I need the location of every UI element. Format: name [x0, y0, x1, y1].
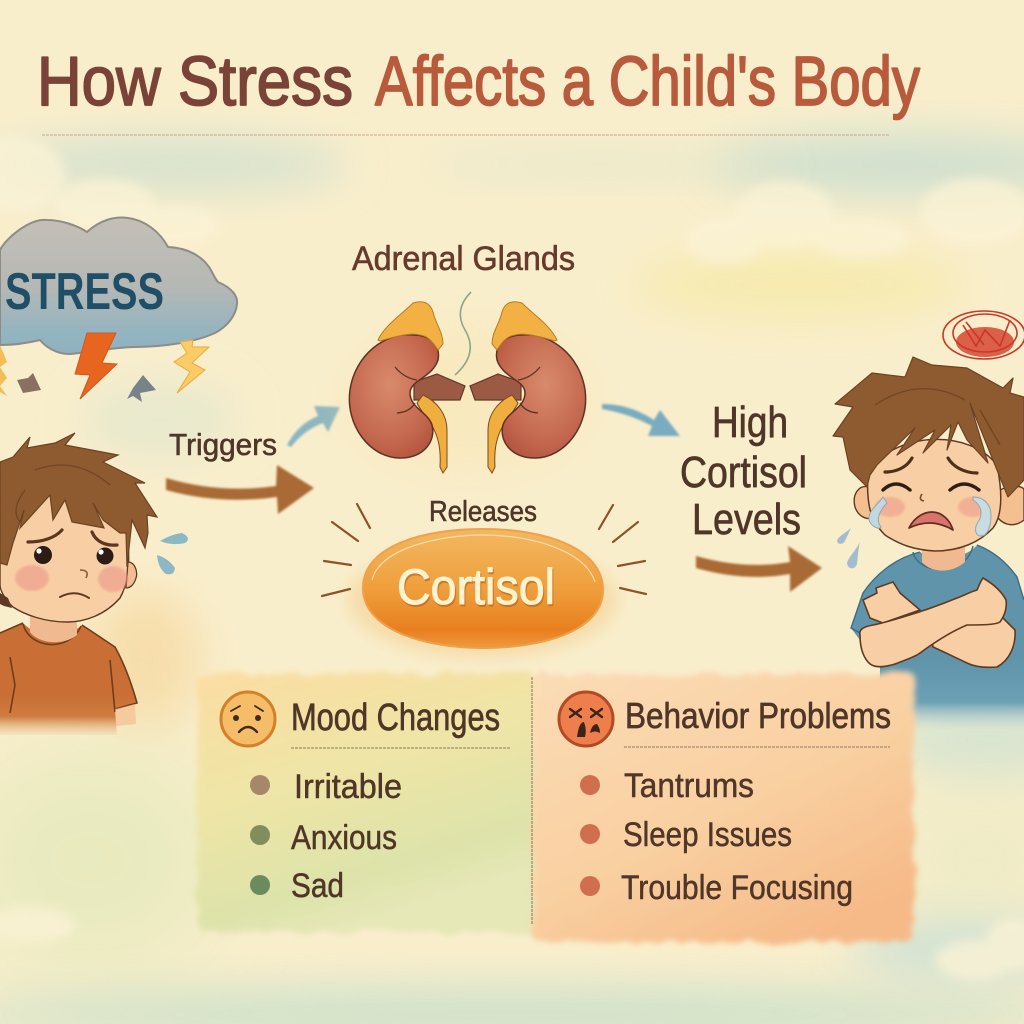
list: mood: Irritable	[294, 768, 402, 806]
high cortisol levels label: Levels	[692, 495, 801, 544]
title: How Stress	[37, 42, 353, 120]
list: mood: Sad	[291, 867, 344, 905]
triggers label: Triggers	[169, 427, 277, 462]
shirt	[851, 545, 1024, 730]
neck	[922, 545, 965, 571]
right kidney	[470, 302, 586, 473]
list: mood	[250, 768, 402, 905]
icon: cortisol rays	[322, 504, 646, 596]
hair	[0, 433, 157, 567]
high cortisol levels label: High	[712, 398, 788, 447]
high cortisol levels label: Cortisol	[680, 448, 807, 497]
list: behavior: Sleep Issues	[623, 816, 792, 854]
crying mouth	[909, 512, 953, 530]
icon: sweat drops	[157, 533, 188, 574]
heading: mood changes: Mood Changes	[291, 697, 500, 739]
arrow: triggers to cortisol	[166, 465, 314, 514]
icon: lightning bolts	[0, 333, 209, 399]
releases label: Releases	[429, 496, 537, 528]
head	[868, 439, 1001, 551]
arrow: to adrenal glands	[287, 406, 340, 447]
panel: mood changes	[197, 674, 537, 932]
back arm	[930, 615, 1015, 667]
ears	[854, 487, 872, 519]
list: behavior: Trouble Focusing	[621, 869, 853, 907]
front arm	[860, 578, 1006, 667]
cortisol pill: Cortisol	[397, 559, 555, 615]
face	[0, 486, 129, 622]
title	[37, 42, 920, 120]
left kidney	[349, 302, 465, 473]
adrenal glands label: Adrenal Glands	[352, 240, 575, 278]
heading: behavior problems: Behavior Problems	[625, 695, 891, 736]
arrow: cortisol to child	[696, 546, 822, 592]
closed eyes	[883, 484, 979, 490]
list: behavior	[580, 767, 853, 907]
stress storm cloud	[0, 218, 237, 402]
arrow: glands to high cortisol	[602, 404, 680, 436]
cortisol pill: Cortisol	[398, 561, 556, 617]
shirt	[0, 623, 137, 735]
icon: debris	[17, 373, 156, 402]
icon: red scribble	[943, 311, 1024, 359]
panel: effects	[197, 674, 914, 942]
list: mood: Anxious	[291, 819, 397, 857]
stress label: STRESS	[5, 263, 164, 321]
list: behavior: Tantrums	[624, 767, 754, 805]
high cortisol levels label	[680, 398, 807, 544]
icon: angry face	[559, 692, 613, 746]
icon: kidneys and adrenal glands	[343, 292, 593, 475]
eyes	[34, 546, 52, 564]
ear	[126, 562, 137, 588]
panel: behavior problems	[532, 674, 914, 942]
hair	[833, 357, 1024, 497]
sad child	[0, 433, 188, 735]
crying child	[833, 311, 1024, 730]
neck	[30, 615, 77, 642]
arm skin	[115, 704, 136, 726]
tears	[869, 497, 887, 528]
icon: sad face	[221, 692, 275, 746]
cortisol pill	[348, 529, 618, 658]
